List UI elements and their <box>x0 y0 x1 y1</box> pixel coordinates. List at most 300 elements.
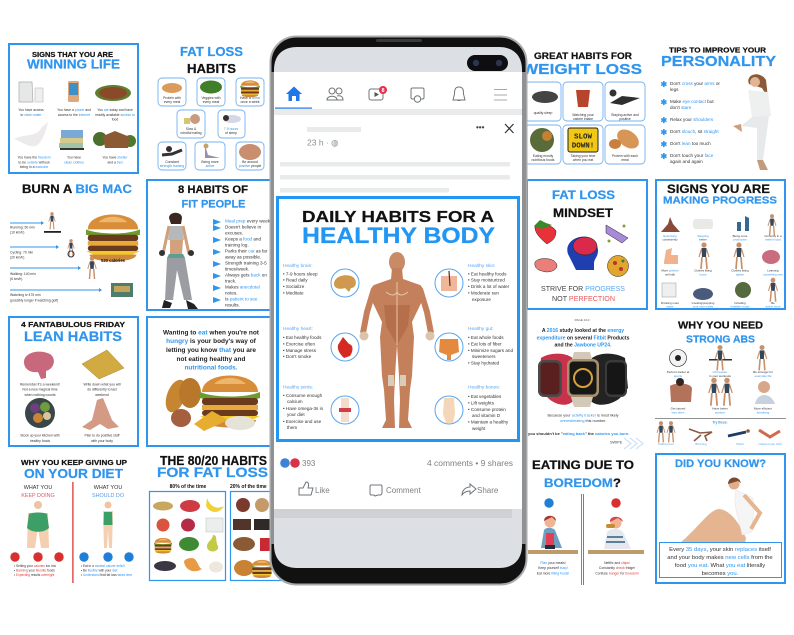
conclusion: you shouldn't be "eating back" the calories you burn. <box>528 431 629 436</box>
caption row two: You have <box>67 156 81 160</box>
captions: benefits: Lift heavier <box>713 370 727 374</box>
heading: 8 habits of: 8 HABITS OF <box>178 184 248 196</box>
card: being active: Being more <box>201 160 219 164</box>
captions: tighter <box>736 272 744 276</box>
reactions <box>280 458 316 468</box>
caption: plan: Keep yourself busy! <box>538 566 568 570</box>
list of tips: Make eye contact but <box>670 99 714 104</box>
divider <box>581 494 584 585</box>
caption row two: and a bed <box>107 160 123 164</box>
camera pill <box>467 55 508 71</box>
list of habits: results. <box>225 302 240 308</box>
list of tips: Relax your shoulders <box>670 117 714 122</box>
icon: news <box>411 88 424 102</box>
card: cheat meal: Have a cheat <box>240 96 260 100</box>
row: running: (10 km/h) <box>10 230 24 234</box>
card: food bowl: Eating mostly <box>533 154 553 158</box>
icons: red crosses <box>10 552 64 562</box>
icon: folded clothes <box>59 130 84 150</box>
card: protein: meal <box>621 158 629 162</box>
caption row two: clean clothes <box>64 160 84 164</box>
icon: brain circle <box>331 269 359 297</box>
icon: video <box>369 86 387 100</box>
card: drink <box>563 82 603 121</box>
card: hours of sleep: of sleep <box>225 131 237 135</box>
label: should do: WHAT YOU <box>94 485 122 491</box>
placeholder name <box>307 127 361 132</box>
list of tips: legs <box>670 87 679 92</box>
caption row two <box>17 156 128 169</box>
button: like: Like <box>315 486 330 495</box>
block: healthy gut: • Stay hydrated <box>468 360 500 366</box>
label: should do: SHOULD DO <box>92 493 124 499</box>
list of habits: Keeps a food and <box>225 236 261 242</box>
heading: great habits for: GREAT HABITS FOR <box>534 51 632 62</box>
caption row two: being in a warzone <box>20 165 48 169</box>
caption: netflix: Constantly check fridge! <box>599 566 635 570</box>
list of tips: ✱ <box>660 116 668 125</box>
illustration: woman eating burger <box>604 517 631 549</box>
page marker: PAGE 1/10 <box>575 318 590 322</box>
list of habits: Parks their car as far <box>225 248 268 254</box>
panel: burn a big mac <box>10 184 140 302</box>
caption: write down: weekend <box>95 393 109 397</box>
caption: netflix: Netflix and chips! <box>604 561 630 565</box>
icon: yoga pose <box>82 398 119 430</box>
captions: benefits: Have better <box>712 406 728 410</box>
captions: Including <box>734 301 746 305</box>
icon: strawberry <box>534 220 556 244</box>
illustration: woman seated <box>680 477 760 543</box>
block: healthy skin <box>468 263 510 302</box>
card: active <box>605 82 645 121</box>
fact box: and your body makes new cells from the <box>667 555 773 561</box>
captions: benefits: breathing <box>757 410 770 414</box>
card: slow down sign <box>563 125 603 164</box>
captions: exercises: Bird dog <box>695 442 707 446</box>
card: active: positive <box>619 117 631 121</box>
top speaker <box>376 39 422 42</box>
panel: why you need strong abs <box>655 320 786 446</box>
caption row one: You ate today and have <box>97 108 133 112</box>
text block: nutritional foods. <box>184 364 238 372</box>
label: 80 percent: 80% of the time <box>170 484 207 490</box>
heading: fat loss: FAT LOSS <box>552 190 615 202</box>
block: healthy joints: • Have omega-3s in <box>283 406 324 411</box>
caption row one: You have access <box>18 108 44 112</box>
card: being active <box>195 142 225 170</box>
captions: productive <box>733 238 747 242</box>
panel: tips to improve your personality <box>660 48 776 170</box>
captions: benefits: posture <box>715 410 725 414</box>
heading: BURN A BIG MAC <box>22 184 132 196</box>
box: healthy foods <box>150 492 226 580</box>
bullets: keep doing <box>14 564 57 577</box>
captions: your own meals <box>693 304 714 308</box>
label: keep doing <box>21 485 55 499</box>
caption text: Because your activity tracker is most likely <box>547 414 619 418</box>
panel: great habits for weight loss <box>522 51 645 164</box>
heading: fit people: FIT PEOPLE <box>182 198 246 210</box>
swipe label: SWIPE <box>610 440 623 444</box>
block: healthy skin: • Drink a lot of water <box>468 284 510 289</box>
tagline: STRIVE FOR PROGRESS <box>541 286 625 293</box>
card: positive people: positive people <box>239 164 261 168</box>
caption: plan <box>537 561 569 576</box>
captions: benefits: sports <box>674 374 683 378</box>
captions: self talk <box>665 272 675 276</box>
list of tips: again and again <box>670 159 703 164</box>
icon: salad bowl <box>25 398 55 428</box>
captions: exercises: Pallof press <box>658 442 674 446</box>
bullets: keep doing: • Setting your calories too low <box>14 564 57 568</box>
bullets: should do: • Eat in a modest calorie deficit <box>81 564 125 568</box>
block: healthy brain: Healthy brain: <box>283 263 313 269</box>
list of habits: Makes anecdotal <box>225 284 260 290</box>
caption: positive stuff: with your body <box>91 439 113 443</box>
block: healthy gut: • Eat whole foods <box>468 335 504 340</box>
icon: home <box>286 86 302 101</box>
captions: Drinking more <box>661 301 679 305</box>
icons: benefits <box>670 345 775 406</box>
captions: benefits: everyday life <box>755 374 772 378</box>
caption row one: to clean water <box>20 113 42 117</box>
exercises <box>657 421 780 442</box>
timestamp: 23 h · ◍ <box>307 138 339 148</box>
captions: Clothes fitting <box>694 268 712 272</box>
captions: Be <box>771 301 775 305</box>
list of habits: times/week. <box>225 266 249 272</box>
captions: benefits: Perform better at <box>667 370 689 374</box>
panel: signs that you are winning life <box>9 44 138 173</box>
captions: consistently <box>662 238 678 242</box>
list of habits: Strength training 3-5 <box>225 260 267 266</box>
list of habits: training log. <box>225 242 249 248</box>
card: strength training: strength training <box>160 164 184 168</box>
caption: write down <box>83 382 121 397</box>
list of tips <box>660 80 720 164</box>
illustration: fit woman <box>159 213 198 309</box>
panel: 8 habits of fit people <box>147 180 277 310</box>
card: hours of sleep <box>218 110 245 138</box>
captions: benefits: Get injured <box>671 406 686 410</box>
caption: write down: do differently to last <box>87 388 117 392</box>
card: protein <box>158 78 186 106</box>
heading: making progress: MAKING PROGRESS <box>663 194 777 206</box>
block: healthy joints: your diet <box>287 412 305 417</box>
heading: boredom: BOREDOM ? <box>544 476 621 490</box>
card: sleep and mindful eating: Slow & <box>186 127 197 131</box>
row: walking: (6 km/h) <box>10 277 22 281</box>
heading: tips: TIPS TO IMPROVE YOUR <box>669 48 766 54</box>
heading: signs you are: SIGNS YOU ARE <box>667 182 770 196</box>
captions: exercises: Plank <box>736 442 744 446</box>
heading: personality: PERSONALITY <box>661 53 776 70</box>
icon: brain <box>24 352 54 379</box>
list of habits: Always gets back on <box>225 272 267 278</box>
card: slow down sign: Taking your time <box>571 154 595 158</box>
table right <box>588 550 644 554</box>
icon: bell <box>453 87 465 100</box>
fact box <box>660 542 782 578</box>
phone mockup <box>270 36 526 584</box>
label: calories: 520 calories <box>101 258 126 263</box>
illustration: woman planning meals <box>541 516 562 549</box>
caption: weekend: Not a new magical time <box>22 388 58 392</box>
block: healthy bones: • Lift weights <box>468 400 495 406</box>
heading: on your diet: ON YOUR DIET <box>24 466 123 481</box>
captions: better mood <box>765 238 781 242</box>
block: healthy bones: • Consume protein <box>468 407 506 412</box>
card: slow down sign: DOWN! <box>572 142 594 150</box>
card: strength training: Constant <box>165 160 179 164</box>
captions: benefits: More efficient <box>754 406 772 410</box>
fact box: food you eat. What you eat literally <box>675 563 765 569</box>
button: comment: Comment <box>386 486 421 495</box>
bullets: keep doing: • Expecting results overnight <box>14 573 54 577</box>
caption: positive stuff <box>84 434 120 443</box>
heading: for fat loss: FOR FAT LOSS <box>157 465 268 480</box>
captions: Currently in a <box>764 234 782 238</box>
block: healthy joints <box>283 384 324 430</box>
right phone edge <box>522 72 526 544</box>
heading: strong abs: STRONG ABS <box>686 334 755 346</box>
card: drink: calorie intake <box>573 117 593 121</box>
icon: meat <box>535 259 557 272</box>
caption: positive stuff: Plan to do positive stuff <box>84 434 120 438</box>
panel: why you keep giving up on your diet <box>10 458 134 583</box>
illustration: smartwatches <box>538 352 628 407</box>
divider <box>72 482 74 583</box>
captions: active more <box>766 304 781 308</box>
caption row one: access to the internet <box>58 113 90 117</box>
box: treats <box>230 492 290 580</box>
card: slow down sign: SLOW <box>574 134 592 142</box>
illustration: slim body <box>103 502 113 548</box>
captions: More positive <box>661 268 679 272</box>
list of tips: Don't slouch, sit straight <box>670 129 719 134</box>
list of tips: ✱ <box>660 128 668 137</box>
illustration: woman in white <box>733 74 771 170</box>
post card <box>274 72 522 509</box>
icon: smartphone <box>68 81 79 102</box>
list of habits: Is patient to see <box>225 296 258 302</box>
block: healthy brain <box>283 263 318 296</box>
table left <box>528 550 578 554</box>
list of tips: Don't lean too much <box>670 141 711 146</box>
text block <box>163 330 260 372</box>
panel: daily habits for a healthy body <box>278 198 518 440</box>
heading: winning life: WINNING LIFE <box>27 58 120 72</box>
panel: fat loss habits <box>158 44 264 170</box>
block: healthy heart: • Don't smoke <box>283 354 312 359</box>
list of habits: Doesn't believe in <box>225 224 262 230</box>
block: healthy brain: • Meditate <box>283 290 304 296</box>
list of tips: ✱ <box>660 98 668 107</box>
icon: food <box>95 85 131 101</box>
captions: Exercising <box>663 234 677 238</box>
icon: joint circle <box>331 396 359 424</box>
block: healthy joints: calcium <box>287 399 303 404</box>
captions: Cooking/prepping <box>692 301 715 305</box>
card: active: Staying active and <box>611 113 639 117</box>
heading: DID YOU KNOW? <box>675 458 766 470</box>
icon: notebook <box>82 350 124 379</box>
heading: eating due to: EATING DUE TO <box>532 458 634 472</box>
captions: benefits: Be stronger for <box>753 370 773 374</box>
block: healthy heart <box>283 326 322 359</box>
row: cycling: Cycling: 70 min <box>10 250 33 254</box>
row: walking <box>10 256 96 281</box>
captions <box>661 234 784 308</box>
study text: and the Jawbone UP24. <box>555 342 612 348</box>
caption: write down: Write down what you will <box>83 382 121 386</box>
button: share: Share <box>477 486 499 495</box>
caption row one <box>18 108 135 122</box>
more menu: ••• <box>476 123 485 132</box>
icon: water jug <box>19 82 43 102</box>
captions: better <box>699 238 707 242</box>
heading: weight loss: WEIGHT LOSS <box>522 61 642 78</box>
row: running: Running: 50 min <box>10 226 35 230</box>
footer strip <box>274 509 512 518</box>
block: healthy gut: • Eat lots of fiber <box>468 342 502 346</box>
heading: 80/20: THE 80/20 HABITS <box>160 454 267 468</box>
list of tips: ✱ <box>660 80 668 89</box>
panel: did you know <box>656 454 785 583</box>
heading: habits: HABITS <box>187 61 236 76</box>
active underline <box>275 108 312 109</box>
button: share <box>462 484 499 495</box>
block: healthy bones: weight <box>472 426 486 431</box>
captions: water <box>666 304 674 308</box>
heading: lean habits: LEAN HABITS <box>24 328 122 344</box>
panel: signs you are making progress <box>656 180 785 309</box>
card: protein <box>605 125 645 164</box>
nav bar <box>275 86 507 109</box>
icon: skin circle <box>435 269 463 297</box>
caption: weekend: when nothing counts <box>24 393 56 397</box>
card: protein: Protein with <box>163 96 181 100</box>
caption row one: food <box>112 118 118 122</box>
bullets: should do <box>81 564 132 577</box>
block: healthy joints: Healthy joints: <box>283 384 313 390</box>
row: watching tv: Watching tv 475 min <box>10 293 41 297</box>
text block: Wanting to eat when you're not <box>163 330 260 336</box>
list of habits <box>213 218 271 308</box>
caption: weekend: Remember it's a weekend! <box>20 382 60 386</box>
captions: loose <box>700 272 707 276</box>
panel: 4 fantabulous friday lean habits <box>9 317 138 446</box>
label: keep doing: KEEP DOING <box>21 493 55 499</box>
illustration: muscular body <box>360 252 434 428</box>
screen background <box>274 47 522 568</box>
tagline <box>541 286 625 303</box>
fact box: Every 35 days, your skin replaces itself <box>669 547 771 553</box>
card: sleep and mindful eating <box>177 110 205 138</box>
block: healthy brain: • Socialize <box>283 284 305 289</box>
caption text: overestimating this number. <box>560 419 606 423</box>
divider <box>655 417 786 420</box>
block: healthy joints: • Exercise and use <box>283 419 322 424</box>
row: watching tv <box>10 283 133 302</box>
icon: pizza <box>608 256 628 276</box>
card: food bowl <box>525 125 561 164</box>
study text <box>537 328 630 348</box>
card: positive people <box>236 142 264 170</box>
card: protein: every meal <box>164 100 181 104</box>
card: cheat meal <box>236 78 264 106</box>
card: veggies: Veggies with <box>201 96 221 100</box>
button: like <box>299 482 330 495</box>
row: watching tv: (possibly longer if watching golf) <box>10 298 58 302</box>
icon: video: 8 <box>381 88 385 94</box>
captions: Clothes fitting <box>731 268 749 272</box>
captions: benefits: in your workouts <box>709 374 731 378</box>
row: running <box>10 212 61 234</box>
heading: signs that you are: SIGNS THAT YOU ARE <box>32 52 113 59</box>
caption: stock kitchen: healthy foods <box>30 439 50 443</box>
stats: comments and shares: 4 comments • 9 shares <box>427 459 513 468</box>
block: healthy heart: Healthy heart: <box>283 326 313 332</box>
list of tips: don't stare <box>670 105 692 110</box>
captions: Being more <box>733 234 748 238</box>
caption row two: You have shelter <box>102 156 128 160</box>
icon: dove <box>14 122 48 146</box>
block: healthy gut: Healthy gut: <box>468 326 494 332</box>
fact box: becomes you. <box>702 571 739 577</box>
card: food bowl: nutritious foods <box>532 158 555 162</box>
icon: house <box>93 131 136 148</box>
list of habits: Meal prep every week. <box>225 218 271 224</box>
caption row two: to be outside without <box>18 160 50 164</box>
heading: fat loss: FAT LOSS <box>180 44 243 59</box>
block: healthy gut: • Minimize sugars and <box>468 348 513 353</box>
card: veggies <box>197 78 225 106</box>
card: drink: Watching your <box>572 113 595 117</box>
grid of progress icons <box>661 214 780 302</box>
panel: fat loss mindset <box>527 180 647 309</box>
caption text <box>547 414 619 423</box>
bullets: should do: • Be flexible with your diet <box>81 568 118 572</box>
block: healthy bones: • Maintain a healthy <box>468 420 509 424</box>
heading: why you need: WHY YOU NEED <box>678 320 763 332</box>
heading: fantabulous friday: 4 FANTABULOUS FRIDAY <box>21 322 125 329</box>
captions: something new <box>763 272 784 276</box>
icon: menu <box>494 90 507 100</box>
caption: netflix: Confuse hunger for boredom <box>595 572 639 576</box>
captions: Sleeping <box>697 234 709 238</box>
list of tips: ✱ <box>660 140 668 149</box>
captions: Learning <box>767 268 779 272</box>
captions: exercises <box>658 442 782 446</box>
caption: plan: Eat more filling foods! <box>537 572 569 576</box>
caption: plan: Plan your meals! <box>540 561 566 565</box>
reactions: 393 <box>302 459 316 468</box>
heading: daily habits: DAILY HABITS FOR A <box>302 209 495 226</box>
block: healthy bones: and vitamin D <box>472 413 501 418</box>
button: comment <box>370 485 421 496</box>
label: 20 percent: 20% of the time <box>230 484 267 490</box>
block: healthy bones: • Eat vegetables <box>468 394 502 399</box>
caption: stock kitchen <box>20 434 60 443</box>
close icon <box>505 124 514 133</box>
block: healthy skin: Healthy skin: <box>468 263 495 269</box>
icon: bones circle <box>435 396 463 424</box>
block: healthy bones: Healthy bones: <box>468 384 500 390</box>
heading: healthy body: HEALTHY BODY <box>302 223 495 248</box>
caption: netflix <box>595 561 639 576</box>
